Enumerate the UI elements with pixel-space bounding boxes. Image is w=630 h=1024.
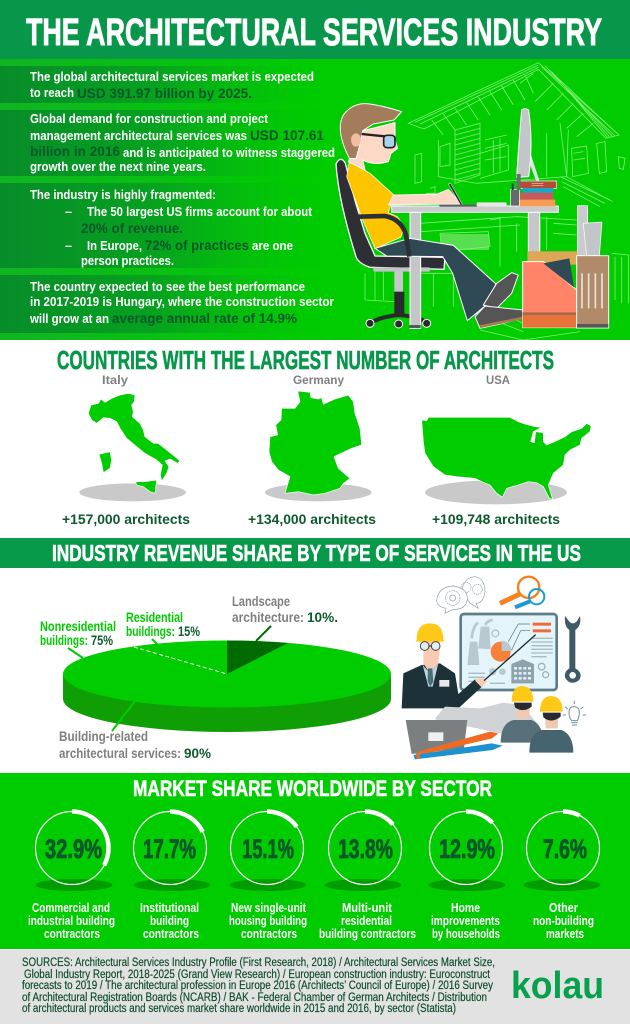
key fact: Hungary: The country expected to see the best performance: [30, 280, 305, 294]
illustration: engineers and presentation board: [402, 577, 586, 759]
key fact: fragmented industry: The 50 largest US firms account for about: [87, 205, 313, 219]
logo: kolau: kolau: [511, 965, 604, 1007]
sector: institutional: 17.7%: [143, 834, 196, 864]
key fact: fragmented industry: –: [65, 239, 72, 253]
icon: wrench: [565, 616, 581, 683]
text block: sources: of Architectural Registration Boards (NCARB) / BAK - Federal Chamber of German Architects / Distribution: [22, 992, 487, 1004]
icon: speech bubbles with gears: [437, 577, 485, 613]
icon: laptop label: [428, 732, 443, 741]
key fact: Hungary: in 2017-2019 is Hungary, where the construction sector: [30, 295, 334, 309]
text block: sources: of architectural products and services market share worldwide in 2015 and 2016, by sector (Statista): [22, 1003, 456, 1015]
key fact: global demand: Global demand for construction and project: [30, 112, 269, 126]
sector: new single-unit housing: New single-unit: [231, 901, 307, 915]
illustration: blueprints: [435, 703, 540, 737]
icon: magnifying glasses: [500, 577, 544, 607]
panel: revenue share chart: [40, 577, 586, 761]
panel: hero key facts: [0, 59, 630, 340]
panel: market share worldwide by sector: [0, 773, 630, 949]
illustration: laptop: [406, 720, 467, 754]
label: landscape architecture: 10%.: [307, 610, 338, 625]
sector: commercial and industrial: Commercial and: [32, 901, 110, 915]
column: Germany: [248, 373, 376, 527]
sector: multi-unit residential: building contractors: [319, 927, 416, 941]
panel: revenue heading banner: [0, 538, 630, 568]
label: nonresidential buildings: 75%: [91, 633, 113, 648]
key fact: market size: to reach: [30, 86, 74, 100]
key fact: global demand: billion in 2016: [30, 143, 120, 159]
column: Italy: +157,000 architects: [62, 512, 190, 527]
icon: light bulb: [563, 701, 586, 725]
column: Italy: Italy: [102, 373, 128, 387]
key fact: fragmented industry: are one: [252, 239, 293, 253]
label: residential buildings: Residential: [126, 610, 183, 625]
illustration: trousers and shoes: [375, 238, 523, 328]
sector: multi-unit residential: 13.8%: [338, 834, 393, 864]
key fact: global demand: USD 107.61: [250, 127, 324, 143]
panel: countries with the most architects: [0, 340, 630, 538]
key fact: global demand: growth over the next nine years.: [30, 160, 206, 174]
sector: other non-building: markets: [546, 927, 584, 941]
key fact: market size: The global architectural services market is expected: [30, 70, 314, 84]
key fact: Hungary: average annual rate of 14.9%: [112, 310, 298, 326]
sector: multi-unit residential: Multi-unit: [342, 901, 393, 915]
sector: commercial and industrial: [28, 812, 115, 941]
pie chart: [63, 640, 391, 732]
sector: institutional: building: [150, 914, 189, 928]
label: residential buildings: buildings:: [126, 624, 175, 639]
arrow: nonresidential pointer: [68, 648, 83, 658]
label: building-related services: 90%: [184, 746, 211, 761]
illustration: house wireframe: [365, 63, 628, 340]
sector: other non-building: 7.6%: [543, 834, 587, 864]
key fact: fragmented industry: person practices.: [81, 254, 174, 268]
illustration: pencils: [413, 732, 503, 759]
icon: wrench hole: [569, 672, 576, 679]
key fact: fragmented industry: In Europe,: [87, 239, 142, 253]
arrow: residential pointer: [152, 639, 158, 645]
sector: commercial and industrial: contractors: [44, 927, 100, 941]
illustration: head: [340, 104, 402, 170]
illustration: presenter in hard hat: [402, 623, 536, 708]
label: residential buildings: [126, 610, 200, 639]
label: building-related services: [59, 729, 211, 761]
column: USA: USA: [486, 373, 510, 387]
sector: other non-building: [524, 812, 600, 941]
panel: footer: [0, 950, 630, 1024]
label: nonresidential buildings: [40, 619, 116, 648]
key fact: Hungary: will grow at an: [29, 312, 109, 326]
key fact: market size: USD 391.97 billion by 2025.: [77, 85, 252, 101]
sector: new single-unit housing: [229, 812, 307, 941]
sector: other non-building: non-building: [533, 914, 594, 928]
sector: institutional: [134, 812, 210, 941]
sector: multi-unit residential: [319, 812, 416, 941]
sector: commercial and industrial: 32.9%: [45, 834, 102, 864]
key fact: market size: [30, 70, 314, 101]
key fact: fragmented industry: The industry is highly fragmented:: [30, 188, 216, 202]
sector: home improvements: [428, 812, 506, 941]
illustration: boxes and drawing rolls: [523, 206, 609, 328]
illustration: architect at desk with house wireframe: [336, 63, 628, 340]
key fact: global demand: and is anticipated to witness staggered: [123, 146, 335, 160]
illustration: shirt and arm: [347, 162, 507, 249]
illustration: desk top: [392, 206, 558, 212]
panel: header: [0, 0, 630, 59]
label: landscape architecture: architecture:: [232, 610, 304, 625]
arrow: building-related pointer: [112, 701, 135, 731]
illustration: chair: [336, 159, 445, 328]
key fact: global demand: [30, 112, 335, 174]
illustration: monitor and books: [511, 109, 557, 206]
column: USA: +109,748 architects: [432, 512, 560, 527]
text block: sources: Global Industry Report, 2018-2025 (Grand View Research) / European construction industry: Euroconstruct: [24, 969, 491, 981]
sector: home improvements: Home: [451, 901, 480, 915]
text block: sources: SOURCES: Architectural Services Industry Profile (First Research, 2018) / Architectural Services Market Size,: [22, 957, 495, 969]
heading: market share: MARKET SHARE WORLDWIDE BY SECTOR: [133, 776, 492, 801]
key fact: global demand: management architectural services was: [30, 129, 247, 143]
sector: home improvements: 12.9%: [439, 834, 495, 864]
column: Germany: +134,000 architects: [248, 512, 376, 527]
sector: home improvements: by households: [432, 927, 500, 941]
sector: new single-unit housing: 15.1%: [242, 834, 294, 864]
key fact: fragmented industry: –: [65, 205, 72, 219]
column: USA: [422, 373, 591, 527]
arrow: landscape pointer: [256, 626, 271, 641]
key fact: fragmented industry: [30, 188, 313, 268]
label: nonresidential buildings: Nonresidential: [40, 619, 116, 634]
illustration: presentation board: [461, 614, 557, 690]
label: landscape architecture: [232, 594, 338, 625]
sector: institutional: Institutional: [140, 901, 199, 915]
text block: sources: [22, 957, 495, 1015]
key fact: fragmented industry: 20% of revenue.: [81, 220, 183, 236]
illustration: seated engineers: [501, 686, 573, 753]
label: building-related services: architectural services:: [59, 746, 181, 761]
label: building-related services: Building-related: [59, 729, 148, 744]
sector: institutional: contractors: [143, 927, 199, 941]
column: Italy: [62, 373, 190, 527]
sector: new single-unit housing: contractors: [241, 927, 297, 941]
sector: other non-building: Other: [549, 901, 578, 915]
label: residential buildings: 15%: [178, 624, 200, 639]
key fact: Hungary: [29, 280, 334, 326]
sector: multi-unit residential: residential: [341, 914, 392, 928]
illustration: desk: [409, 212, 540, 328]
sector: home improvements: improvements: [431, 914, 500, 928]
sector: new single-unit housing: housing building: [229, 914, 307, 928]
label: landscape architecture: Landscape: [232, 594, 290, 609]
label: nonresidential buildings: buildings:: [40, 633, 88, 648]
key fact: fragmented industry: 72% of practices: [145, 237, 249, 253]
text block: sources: forecasts to 2019 / The architectural profession in Europe 2016 (Architects’ Council of Europe) / 2016 Survey: [22, 980, 493, 992]
sector: commercial and industrial: industrial building: [28, 914, 115, 928]
column: Germany: Germany: [293, 373, 344, 387]
illustration: armrest: [358, 216, 409, 257]
